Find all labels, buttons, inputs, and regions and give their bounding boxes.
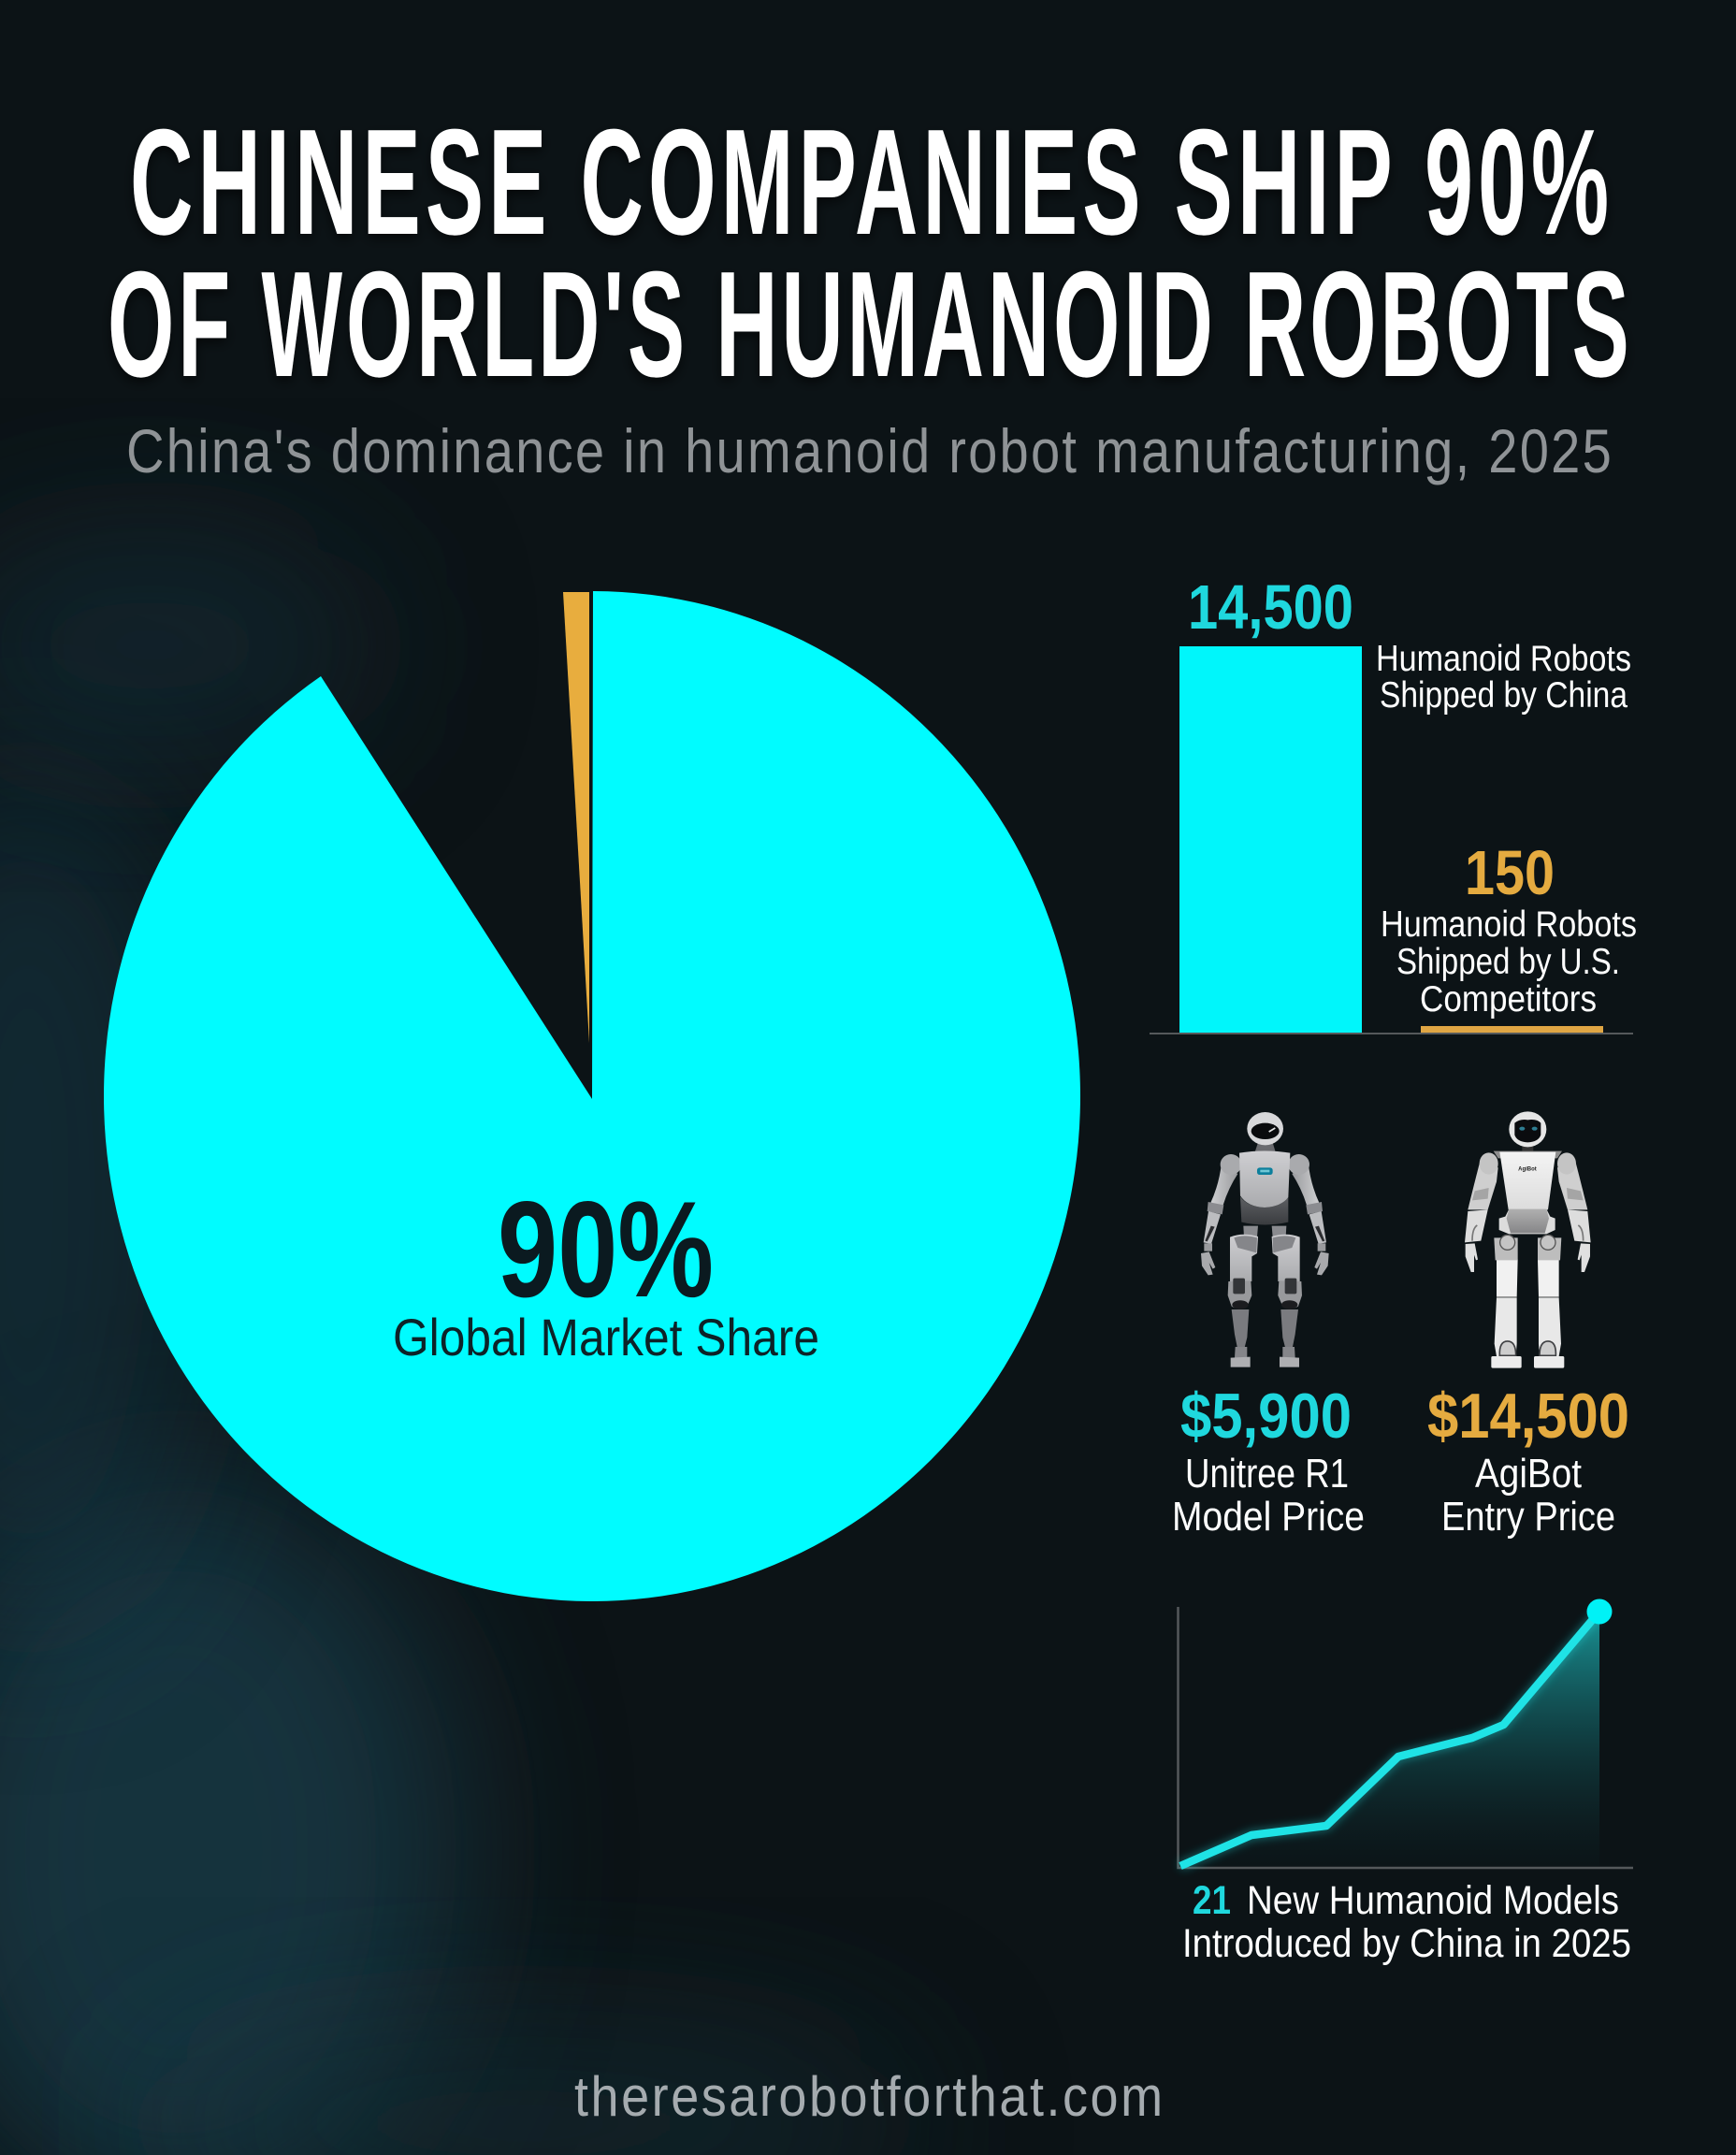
price: AgiBot: $14,500 (1427, 1381, 1629, 1452)
chart axes (1179, 1607, 1633, 1868)
chart caption (1182, 1878, 1631, 1966)
chart end point (1586, 1599, 1613, 1624)
chart caption: New Humanoid Models (1247, 1878, 1619, 1923)
pie chart: global market share (104, 591, 1080, 1601)
bar label: China: Humanoid Robots (1376, 639, 1631, 679)
bar value: China: 14,500 (1188, 572, 1353, 643)
chart line glow (1180, 1612, 1599, 1866)
line chart: new humanoid models (1179, 1599, 1633, 1966)
bar: China (1179, 646, 1362, 1033)
bar value: U.S.: 150 (1465, 838, 1555, 908)
chart caption: Introduced by China in 2025 (1182, 1921, 1631, 1966)
chart line (1180, 1612, 1599, 1866)
price: AgiBot (1427, 1381, 1629, 1540)
icon: Unitree R1 robot (1201, 1112, 1329, 1367)
price: Unitree R1: $5,900 (1180, 1381, 1352, 1452)
footer source: theresarobotforthat.com (574, 2065, 1163, 2129)
subtitle: China's dominance in humanoid robot manufacturing, 2025 (126, 417, 1612, 485)
bar label: U.S.: Shipped by U.S. (1396, 942, 1620, 982)
chart area fill (1180, 1612, 1599, 1866)
icon: AgiBot robot: AgiBot (1518, 1166, 1537, 1172)
title: OF WORLD'S HUMANOID ROBOTS (108, 239, 1629, 408)
title (108, 97, 1629, 408)
bar axis (1150, 1033, 1633, 1034)
pie value: 90%: 90% (498, 1173, 714, 1325)
title: CHINESE COMPANIES SHIP 90% (130, 97, 1609, 266)
pie slice: U.S. competitors (563, 592, 589, 1043)
bar label: U.S.: Competitors (1420, 979, 1597, 1020)
bar: U.S. (1421, 1026, 1603, 1033)
bar label: U.S. (1381, 904, 1637, 1020)
pie slice: China 90% (104, 591, 1080, 1601)
price: AgiBot: AgiBot (1475, 1451, 1582, 1497)
price: AgiBot: Entry Price (1441, 1494, 1615, 1540)
bar chart: shipments (1150, 572, 1637, 1034)
bar label: China: Shipped by China (1380, 675, 1628, 716)
chart caption: 21 (1193, 1878, 1231, 1923)
bar label: U.S.: Humanoid Robots (1381, 904, 1637, 945)
price: Unitree R1 (1172, 1381, 1365, 1540)
icon: AgiBot robot (1465, 1111, 1591, 1368)
price: Unitree R1: Unitree R1 (1185, 1451, 1349, 1497)
price: Unitree R1: Model Price (1172, 1494, 1365, 1540)
pie label: Global Market Share (393, 1308, 819, 1367)
bar label: China (1376, 639, 1631, 716)
